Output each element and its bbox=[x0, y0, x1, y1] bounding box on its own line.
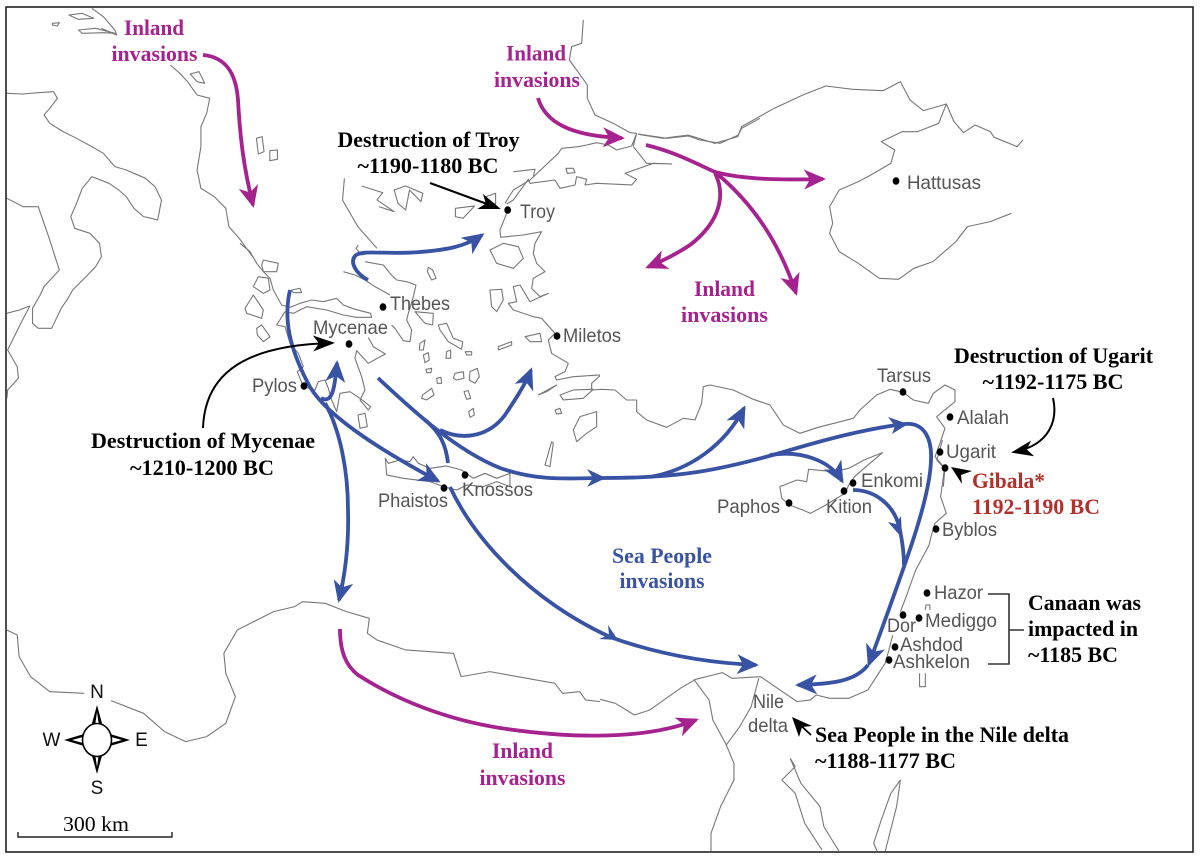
label: Canaan impact bbox=[1028, 590, 1141, 667]
label: Sea People in the Nile delta: ~1188-1177 BC bbox=[815, 748, 956, 773]
arrow: pointer to Mycenae bbox=[203, 343, 332, 428]
label: inland invasions, Black Sea bbox=[494, 40, 580, 92]
label: Sea People in the Nile delta bbox=[815, 722, 1069, 773]
city labels: Phaistos bbox=[378, 490, 448, 512]
city labels: Troy bbox=[520, 201, 555, 223]
label: inland invasions, North Africa bbox=[480, 738, 566, 790]
city labels: Miletos bbox=[563, 325, 621, 347]
arrow: inland invasion to the Bosporus bbox=[538, 98, 622, 138]
city labels: Hazor bbox=[934, 582, 983, 604]
city labels: Mycenae bbox=[313, 317, 388, 339]
label: Gibala bbox=[972, 468, 1100, 519]
arrow: Levant to Nile delta bbox=[798, 665, 868, 685]
arrow: to Cyprus bbox=[770, 454, 842, 481]
bracket: Canaan cities bbox=[988, 594, 1024, 664]
arrow: south to Libya bbox=[325, 403, 348, 600]
label: Sea People invasions bbox=[612, 543, 712, 593]
arrow: pointer to Gibala bbox=[951, 467, 972, 484]
label: Canaan impact: Canaan was bbox=[1028, 590, 1141, 615]
label: Canaan impact: ~1185 BC bbox=[1028, 642, 1118, 667]
arrow: Crete to Nile bbox=[450, 487, 756, 665]
label: inland invasions, Black Sea: invasions bbox=[494, 67, 580, 92]
label: destruction of Mycenae: Destruction of Mycenae bbox=[91, 428, 315, 453]
icon: compass rose bbox=[43, 682, 148, 799]
label: Gibala: Gibala* bbox=[972, 468, 1045, 493]
city labels: Knossos bbox=[462, 479, 533, 501]
arrow: pointer to Troy bbox=[430, 183, 498, 208]
scale bar bbox=[18, 812, 172, 837]
Sea People invasion arrows bbox=[287, 235, 931, 685]
city labels bbox=[252, 172, 1009, 737]
inland invasion arrows bbox=[203, 55, 823, 736]
label: inland invasions, Black Sea: Inland bbox=[506, 40, 566, 66]
scale bar: 300 km bbox=[63, 812, 129, 836]
arrowhead near Tarsus bbox=[888, 417, 908, 434]
city labels: Paphos bbox=[717, 496, 780, 518]
city labels: Kition bbox=[826, 496, 872, 518]
arrow: to southern Anatolia bbox=[650, 408, 744, 477]
city labels: Alalah bbox=[957, 407, 1009, 429]
connector: to Crete bbox=[425, 420, 448, 463]
icon: compass rose: S bbox=[91, 778, 103, 799]
arrow: main eastern route down the Levant bbox=[378, 378, 931, 664]
city labels: Dor bbox=[887, 615, 916, 637]
arrowhead on main route bbox=[587, 469, 606, 487]
label: inland invasions, north-west: Inland bbox=[124, 15, 184, 40]
label: inland invasions, North Africa: Inland bbox=[492, 738, 553, 763]
arrow: north to Troy bbox=[353, 235, 482, 280]
label: destruction of Mycenae: ~1210-1200 BC bbox=[130, 455, 274, 480]
label: destruction of Troy: ~1190-1180 BC bbox=[358, 153, 498, 178]
city labels: Byblos bbox=[942, 519, 997, 541]
arrow: inland invasion east to Hattusas bbox=[646, 145, 823, 179]
icon: compass rose: W bbox=[43, 730, 61, 751]
arrow: pointer to Nile delta bbox=[792, 717, 812, 737]
arrow: up to Mycenae bbox=[321, 363, 337, 399]
label: destruction of Ugarit: Destruction of Ugarit bbox=[954, 343, 1153, 368]
label: inland invasions, Anatolia bbox=[681, 276, 768, 327]
city labels: delta bbox=[748, 715, 788, 737]
arrowhead on Cyprus to Levant route bbox=[888, 516, 902, 538]
label: Sea People in the Nile delta: Sea People in the Nile delta bbox=[815, 722, 1069, 747]
label: inland invasions, north-west bbox=[112, 15, 198, 66]
label: destruction of Troy bbox=[338, 127, 520, 178]
arrow: inland invasion into the Adriatic bbox=[203, 55, 253, 205]
city labels: Mediggo bbox=[925, 610, 997, 632]
city dots bbox=[301, 177, 953, 664]
label: destruction of Ugarit: ~1192-1175 BC bbox=[982, 369, 1124, 394]
arrowhead on Crete to Nile route bbox=[599, 625, 618, 640]
city labels: Hattusas bbox=[907, 172, 981, 194]
city labels: Pylos bbox=[252, 375, 297, 397]
icon: compass rose: E bbox=[135, 730, 148, 751]
icon: compass rose: N bbox=[90, 682, 104, 703]
arrow: inland invasion south-west bbox=[648, 173, 720, 267]
city labels: Ashdod bbox=[900, 634, 963, 656]
label: Canaan impact: impacted in bbox=[1028, 616, 1138, 641]
city labels: Nile bbox=[753, 691, 784, 713]
city labels: Tarsus bbox=[877, 365, 931, 387]
city labels: Ugarit bbox=[946, 441, 997, 463]
arrow: inland invasion across North Africa bbox=[340, 629, 696, 736]
label: destruction of Ugarit bbox=[954, 343, 1153, 394]
label: inland invasions, Anatolia: invasions bbox=[681, 302, 768, 327]
label: destruction of Mycenae bbox=[91, 428, 315, 480]
label: Sea People invasions: invasions bbox=[620, 568, 705, 593]
arrow: inland invasion south bbox=[715, 172, 796, 293]
city labels: Ashkelon bbox=[893, 651, 970, 673]
arrow: to Miletos bbox=[440, 370, 531, 436]
arrow: western route to Crete bbox=[287, 290, 438, 481]
label: destruction of Troy: Destruction of Troy bbox=[338, 127, 520, 152]
label: Sea People invasions: Sea People bbox=[612, 543, 712, 568]
label: Gibala: 1192-1190 BC bbox=[972, 494, 1100, 519]
city labels: Enkomi bbox=[861, 470, 923, 492]
label: inland invasions, north-west: invasions bbox=[112, 41, 198, 66]
label: inland invasions, Anatolia: Inland bbox=[694, 276, 755, 301]
black pointer arrows bbox=[203, 183, 1054, 737]
city labels: Thebes bbox=[390, 293, 450, 315]
label: inland invasions, North Africa: invasions bbox=[480, 765, 566, 790]
arrow: pointer to Ugarit bbox=[1014, 398, 1054, 452]
arrow: Cyprus to Levant bbox=[853, 490, 904, 565]
